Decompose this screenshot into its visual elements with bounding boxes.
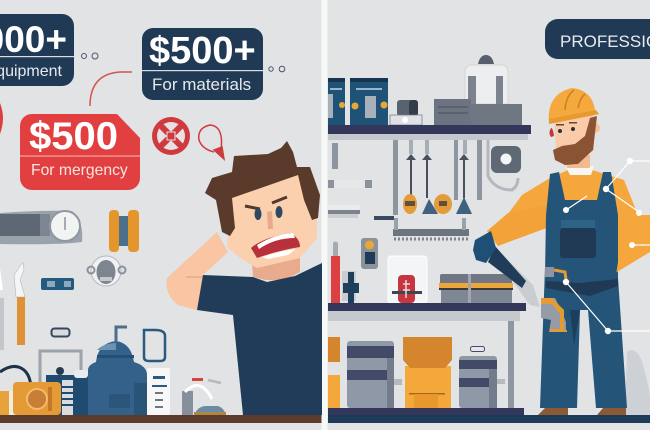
tool: cable xyxy=(0,366,31,390)
dots xyxy=(269,66,285,72)
person xyxy=(166,141,322,415)
beard xyxy=(553,116,597,165)
tool: kettle xyxy=(182,378,226,415)
upper shelf xyxy=(328,125,531,140)
tool: orange clamp xyxy=(109,210,139,252)
tool: gauge machine xyxy=(0,211,82,244)
hanging tools xyxy=(393,140,518,215)
glass jar xyxy=(465,55,508,106)
face xyxy=(554,112,594,165)
price tag: materials xyxy=(142,28,263,100)
icon: looping arrow xyxy=(199,125,224,159)
glove xyxy=(473,231,496,263)
red cylinder xyxy=(331,242,340,303)
eyes xyxy=(556,122,577,133)
table xyxy=(0,415,322,423)
tool: white dispenser xyxy=(147,368,170,415)
arm crease xyxy=(186,276,203,278)
alert marker xyxy=(0,103,3,134)
tool: pliers xyxy=(0,262,25,350)
overall bib xyxy=(545,172,618,275)
icon: emergency wheel xyxy=(152,117,190,155)
arm xyxy=(166,232,228,310)
tool: blue engine xyxy=(46,367,96,415)
badge: professional xyxy=(545,19,650,59)
divider xyxy=(322,0,328,430)
upper shelf items xyxy=(328,55,522,125)
tool: orange generator xyxy=(0,382,61,415)
tool pouch xyxy=(545,267,566,280)
left sleeve xyxy=(487,205,552,246)
collar xyxy=(566,166,594,175)
lower shelf items xyxy=(328,337,505,408)
callout dots xyxy=(563,158,642,334)
tool: bottle outline xyxy=(144,330,165,361)
floor xyxy=(328,415,650,423)
tool: blue tank xyxy=(88,327,147,415)
price tag: emergency xyxy=(20,114,140,190)
right arm xyxy=(592,215,650,284)
orange box left xyxy=(328,337,340,408)
storage bin xyxy=(459,346,505,408)
tool: frame xyxy=(40,351,81,391)
boots xyxy=(538,408,626,415)
torso xyxy=(508,170,638,262)
shadow xyxy=(625,350,650,415)
hair xyxy=(205,141,320,236)
lower shelf xyxy=(328,408,524,415)
shirt xyxy=(197,263,322,415)
price tag: materials: For materials xyxy=(152,75,251,94)
helmet xyxy=(549,88,599,124)
dots xyxy=(82,53,98,59)
toolboxes xyxy=(434,99,522,125)
red device xyxy=(388,256,427,303)
forearm xyxy=(488,246,526,288)
neck xyxy=(567,155,590,168)
panel: professional xyxy=(328,19,650,423)
price tag: materials: $500+ xyxy=(149,30,256,72)
blue cases xyxy=(328,78,388,125)
mouth xyxy=(251,233,300,259)
eyes and brows xyxy=(245,197,287,229)
price tag: emergency: $500 xyxy=(29,115,118,158)
tool: mask xyxy=(88,256,126,286)
pegboard tools xyxy=(328,143,394,220)
tool: blue block xyxy=(41,278,74,290)
belt xyxy=(546,279,618,296)
right hand xyxy=(582,265,618,290)
drill xyxy=(541,298,567,332)
tool: small handle xyxy=(52,328,70,336)
neck xyxy=(252,250,300,280)
orange box xyxy=(403,337,452,408)
wall gauge xyxy=(491,146,521,173)
toolbox on shelf xyxy=(439,274,513,303)
price tag: equipment xyxy=(0,14,74,86)
storage bin xyxy=(347,341,402,408)
overall legs xyxy=(540,262,627,408)
price tag: emergency: For mergency xyxy=(31,162,128,179)
ear xyxy=(590,123,600,133)
gauge xyxy=(361,238,378,269)
ear protector xyxy=(550,128,554,137)
connector xyxy=(90,72,132,106)
panel: DIY xyxy=(0,14,322,423)
small device xyxy=(390,100,422,125)
tool shadow xyxy=(500,252,540,307)
cross valve xyxy=(342,271,359,303)
middle shelf xyxy=(328,303,526,408)
worker xyxy=(473,88,650,415)
comb rack xyxy=(393,218,469,239)
face xyxy=(227,170,317,268)
callout lines xyxy=(566,161,650,331)
